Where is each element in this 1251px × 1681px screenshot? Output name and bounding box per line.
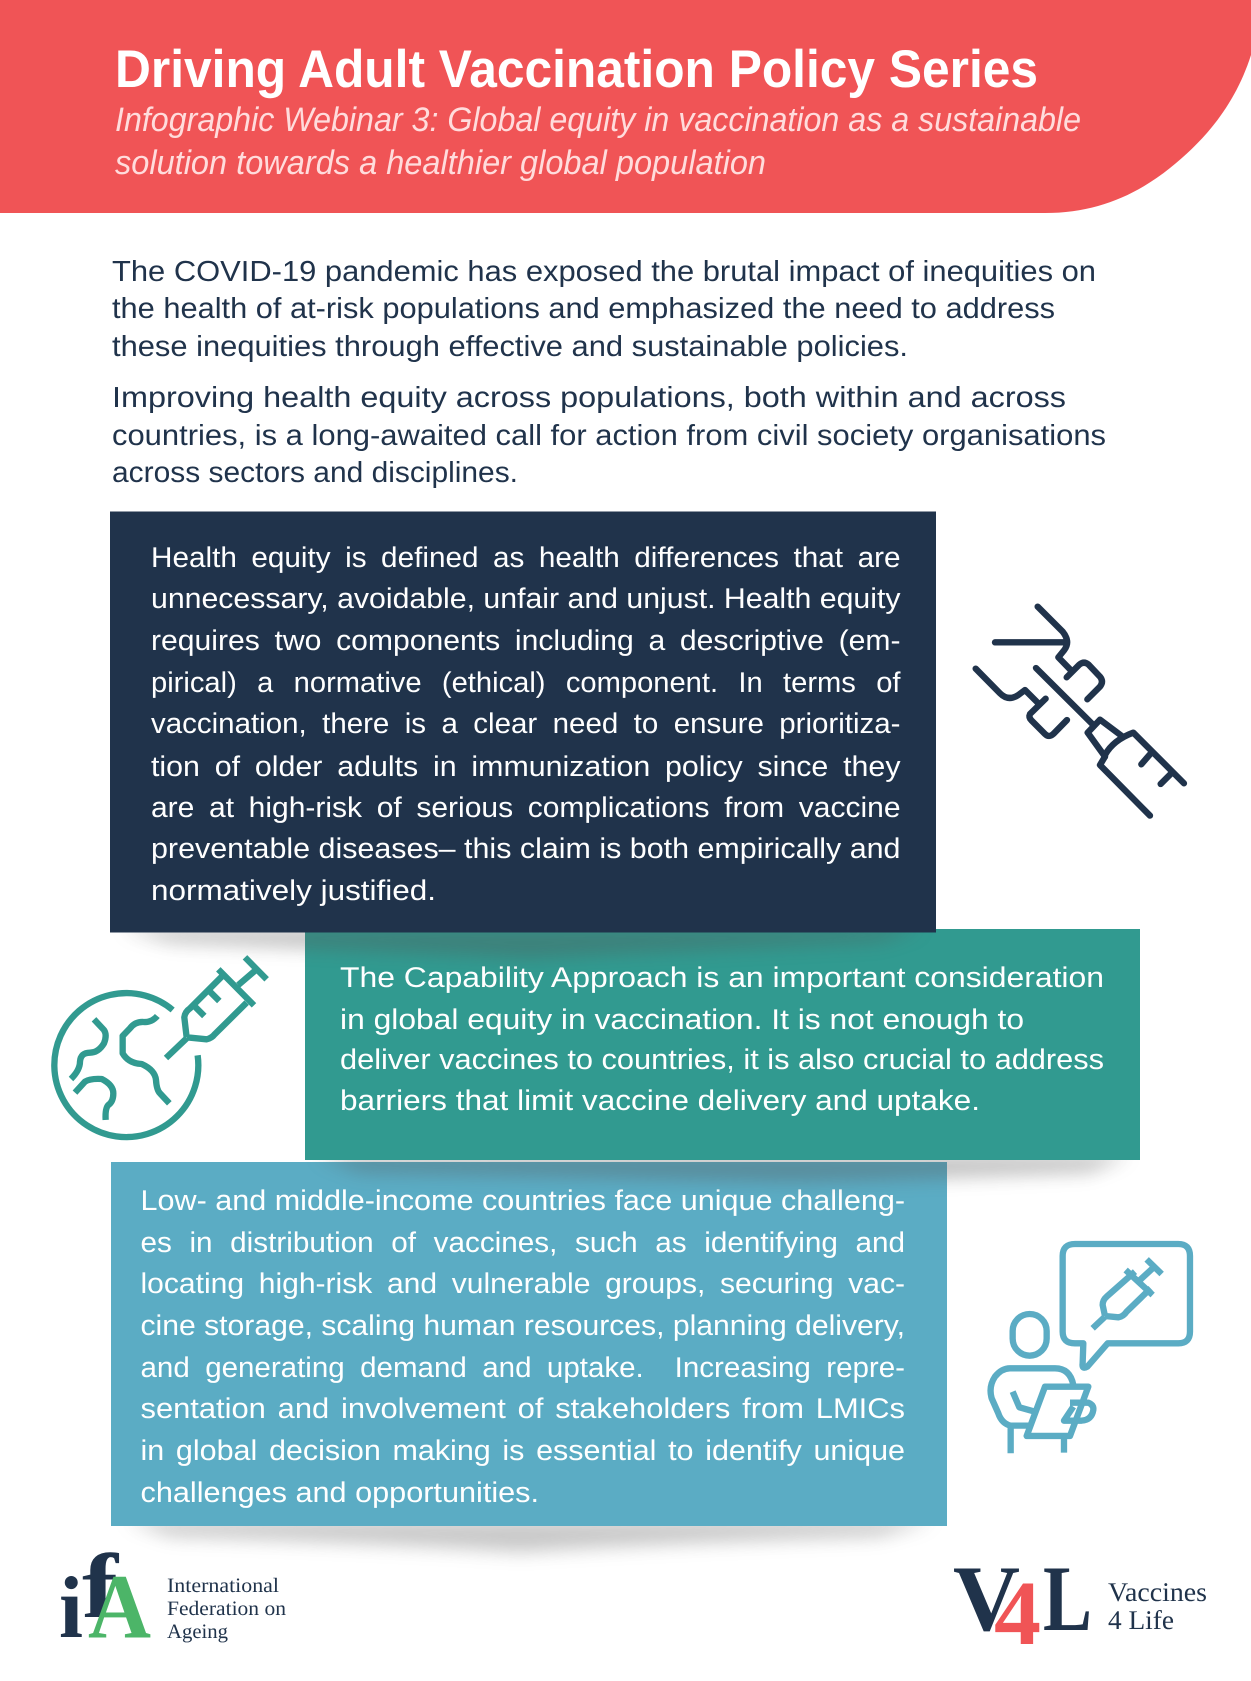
subtitle — [115, 101, 1081, 182]
panel text: tion of older adults in immunization policy since they — [151, 751, 901, 783]
intro paragraph 1: The COVID-19 pandemic has exposed the brutal impact of inequities on — [112, 256, 1096, 288]
icon: globe with syringe — [54, 957, 267, 1137]
intro paragraph 1: the health of at-risk populations and emphasized the need to address — [112, 293, 1055, 325]
panel text: barriers that limit vaccine delivery and uptake. — [340, 1085, 980, 1117]
logo mark — [59, 1535, 151, 1658]
intro paragraph 1: these inequities through effective and sustainable policies. — [112, 331, 908, 363]
panel: low- and middle-income countries — [111, 1162, 947, 1526]
panel text: es in distribution of vaccines, such as identifying and — [140, 1227, 905, 1259]
icon: person with speech bubble — [991, 1244, 1190, 1453]
intro paragraph 2: Improving health equity across populations, both within and across — [112, 382, 1066, 414]
intro paragraph 2 — [112, 382, 1106, 489]
logo mark: V — [953, 1547, 1020, 1651]
panel text — [140, 1185, 905, 1509]
panel text: cine storage, scaling human resources, planning delivery, — [140, 1310, 905, 1342]
panel text: unnecessary, avoidable, unfair and unjust. Health equity — [151, 583, 901, 615]
logo wordmark: 4 Life — [1108, 1605, 1174, 1635]
logo wordmark — [1108, 1577, 1207, 1635]
panel text: preventable diseases– this claim is both empirically and — [151, 833, 900, 865]
panel text: Low- and middle-income countries face unique challeng- — [140, 1185, 905, 1217]
logo wordmark: Vaccines — [1108, 1577, 1207, 1607]
panel text: challenges and opportunities. — [140, 1477, 539, 1509]
panel text: are at high-risk of serious complications from vaccine — [151, 792, 900, 824]
panel text: sentation and involvement of stakeholders from LMICs — [140, 1393, 905, 1425]
panel text: in global decision making is essential to identify unique — [140, 1435, 905, 1467]
header banner — [0, 0, 1251, 213]
intro paragraph 2: countries, is a long-awaited call for action from civil society organisations — [112, 420, 1106, 452]
logo: Vaccines 4 Life — [953, 1547, 1207, 1664]
logo wordmark — [167, 1575, 286, 1643]
logo mark: i — [59, 1560, 83, 1657]
panel text: and generating demand and uptake. Increasing repre- — [140, 1352, 905, 1384]
subtitle: Infographic Webinar 3: Global equity in vaccination as a sustainable — [115, 101, 1081, 139]
intro paragraph 1 — [112, 256, 1096, 363]
panel text: pirical) a normative (ethical) component. In terms of — [151, 667, 901, 699]
logo wordmark: Ageing — [167, 1621, 228, 1643]
logo mark: f — [82, 1535, 120, 1637]
panel text: deliver vaccines to countries, it is also crucial to address — [340, 1044, 1104, 1076]
logo mark: A — [88, 1556, 151, 1658]
panel: capability approach — [305, 929, 1140, 1160]
logo wordmark: Federation on — [167, 1598, 286, 1620]
logo mark: L — [1043, 1547, 1092, 1651]
panel: health equity definition — [110, 512, 936, 932]
title: Driving Adult Vaccination Policy Series — [115, 40, 1038, 99]
logo mark — [953, 1547, 1092, 1664]
panel text: locating high-risk and vulnerable groups, securing vac- — [140, 1268, 905, 1300]
panel text — [151, 542, 901, 907]
icon: broken chain syringe — [976, 607, 1184, 816]
panel text: normatively justified. — [151, 875, 436, 907]
logo: International Federation on Ageing — [59, 1535, 286, 1658]
panel text: requires two components including a descriptive (em- — [151, 625, 901, 657]
logo mark: 4 — [994, 1562, 1041, 1664]
panel text: vaccination, there is a clear need to ensure prioritiza- — [151, 708, 900, 740]
panel text: The Capability Approach is an important consideration — [340, 962, 1104, 994]
panel text — [340, 962, 1104, 1117]
panel text: Health equity is defined as health differences that are — [151, 542, 901, 574]
subtitle: solution towards a healthier global population — [115, 144, 766, 182]
panel text: in global equity in vaccination. It is not enough to — [340, 1004, 1024, 1036]
logo wordmark: International — [167, 1575, 279, 1597]
intro paragraph 2: across sectors and disciplines. — [112, 457, 518, 489]
